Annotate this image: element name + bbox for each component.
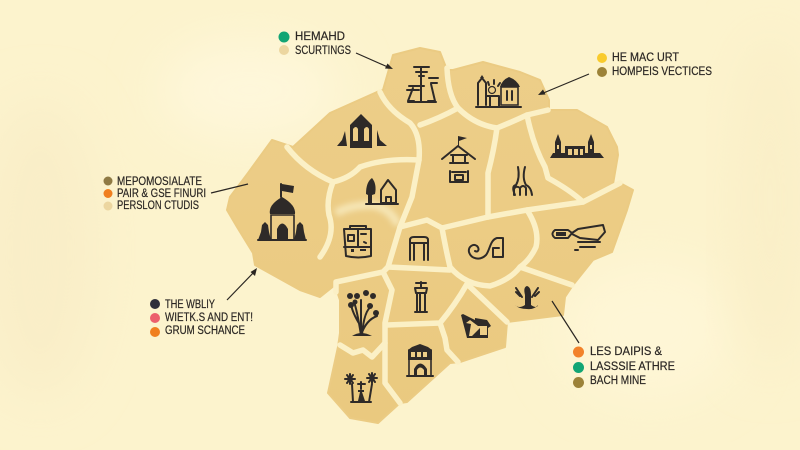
icon: boat lantern [515,286,539,309]
legend: left [104,176,206,212]
icon: watch tower [415,282,427,312]
legend: left: MEPOMOSIALATE [117,176,202,188]
legend: lower left [150,299,253,337]
icon: box house [461,314,491,338]
legend: top [278,31,351,57]
icon: town hall [407,344,433,376]
legend: top: SCURTINGS [295,45,351,57]
icon: antenna towers [407,67,438,102]
icon: flower gate [345,373,377,402]
legend: bottom right: BACH MINE [590,375,646,387]
legend: lower left: WIETK.S AND ENT! [165,312,253,324]
icon: small arch [513,167,532,195]
legend: left: PERSLON CTUDIS [117,200,199,212]
icon: flowering tree [347,290,379,336]
legend: lower left: THE WBLIY [165,299,215,311]
arrow: to southwest region [227,268,257,300]
icon: east palace [550,134,604,158]
leader line: to west region [211,184,248,193]
arrow: to northeast region [538,74,589,95]
arrow: to north region [356,53,393,69]
leader line: to southeast region [552,301,579,343]
icon: twin buildings with sun [476,75,521,107]
icon: swirl [469,238,503,259]
icon: capsule device [552,225,605,250]
legend: top right: HE MAC URT [612,52,679,64]
legend: bottom right [573,346,675,388]
legend: top: HEMAHD [295,31,345,43]
icon: gothic temple [337,114,387,148]
icon: table arch [410,237,428,260]
icon: domed shrine [258,184,306,240]
legend: left: PAIR & GSE FINURI [117,188,206,200]
icon: tree and house [366,178,398,204]
legend: bottom right: LES DAIPIS & [590,346,662,358]
legend: top right: HOMPEIS VECTICES [612,66,712,78]
legend: top right [597,52,712,78]
map: regions [227,48,633,423]
icon: pagoda [442,136,475,182]
legend: lower left: GRUM SCHANCE [165,325,245,337]
legend: bottom right: LASSSIE ATHRE [590,361,675,373]
icon: suitcase machine [344,226,371,258]
